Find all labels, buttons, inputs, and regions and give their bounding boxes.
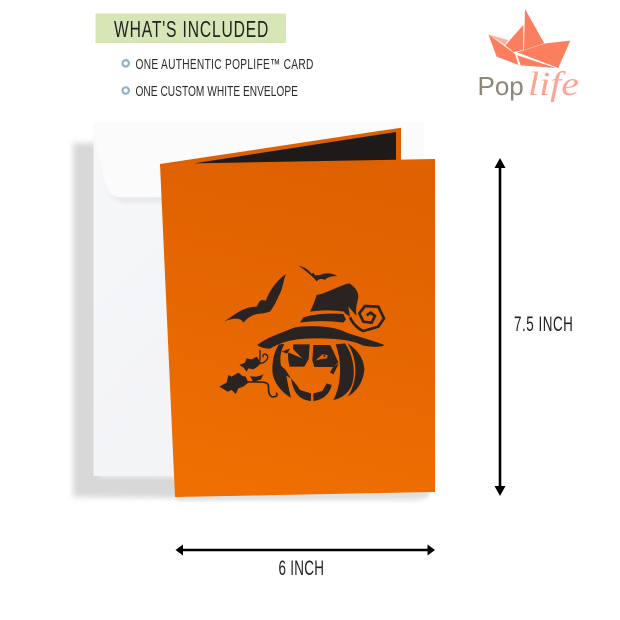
envelope shadow [73,143,425,500]
logo: poplife [478,9,579,103]
icon: left bat [224,274,286,323]
card: front cover [160,159,435,497]
flap shadow [106,188,200,202]
envelope [94,122,424,476]
arrow: height dimension [494,158,506,496]
icon: witch hat [257,283,384,349]
icon: right bat [299,266,337,281]
logo word: pop: Pop [478,71,524,101]
icon: origami boat [488,9,570,68]
label: 6 inch: 6 INCH [278,556,324,580]
icon: pumpkin [272,343,364,401]
arrow: width dimension [176,544,435,556]
heading: what's included: WHAT'S INCLUDED [114,17,268,43]
logo word: life: life [528,66,579,103]
item: poplife card: ONE AUTHENTIC POPLIFE™ CARD [136,56,313,72]
label: 7.5 inch: 7.5 INCH [514,312,573,336]
list: included items [122,56,313,99]
envelope flap [94,122,424,197]
card shadow [176,492,430,500]
card: back panel inside [160,128,401,166]
cut-out: witch pumpkin with bats [219,266,384,401]
item: white envelope: ONE CUSTOM WHITE ENVELOPE [136,83,298,99]
card inside: black [190,132,396,164]
icon: leaves and vine [219,350,277,397]
